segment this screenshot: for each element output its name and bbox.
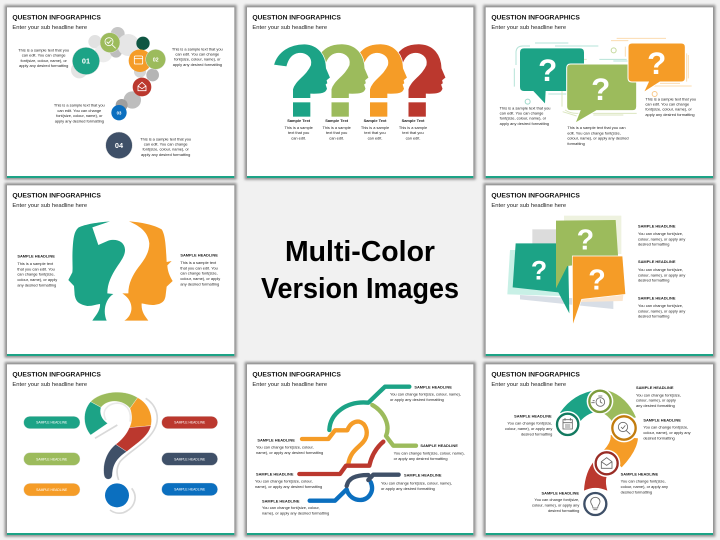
heading: QUESTION INFOGRAPHICS <box>491 15 580 22</box>
heading: QUESTION INFOGRAPHICS <box>252 15 341 22</box>
text block 02: font(size, colour, name), or <box>174 57 221 62</box>
label 3: colour, name), or apply any <box>643 430 691 435</box>
teal line <box>329 387 409 430</box>
teal face <box>68 221 125 321</box>
subheading: Enter your sub headline here <box>491 25 566 31</box>
caption 3: This is a sample <box>361 125 389 130</box>
caption 4: can edit. <box>406 135 420 140</box>
right text block: any desired formatting <box>180 281 219 286</box>
text block 02: can edit. You can change <box>175 52 219 57</box>
orange head question mark <box>357 44 407 117</box>
text block middle: formatting <box>567 141 585 146</box>
panel: slide 3, speech bubbles <box>483 5 715 180</box>
text block left: apply any desired formatting <box>500 121 549 126</box>
green speech bubble <box>567 64 637 123</box>
right text block: SAMPLE HEADLINE <box>180 253 218 258</box>
label 3: or apply any desired formatting <box>394 456 448 461</box>
icon: magnifier <box>610 414 638 442</box>
text block 04: can edit. You can change <box>144 142 188 147</box>
label 3: SAMPLE HEADLINE <box>420 443 458 448</box>
panel: slide 6, segmented question mark <box>5 362 237 537</box>
text block 03: apply any desired formatting <box>55 118 104 123</box>
center title: Version Images <box>261 273 459 305</box>
label 2: desired formatting <box>521 431 552 436</box>
text block 03: can edit. You can change <box>57 108 101 113</box>
label 4: SAMPLE HEADLINE <box>621 471 659 476</box>
subheading: Enter your sub headline here <box>491 382 566 388</box>
pill red: SAMPLE HEADLINE <box>174 421 206 425</box>
text block right: apply any desired formatting <box>645 112 695 117</box>
right text block: colour, name), or apply <box>180 276 220 281</box>
text block right: can edit. You can change <box>645 102 689 107</box>
label 5: or apply any desired formatting <box>381 486 435 491</box>
right text block: can change font(size, <box>180 271 218 276</box>
caption 1: text that you <box>288 130 309 135</box>
caption 4: Sample Text <box>402 118 425 123</box>
text block 1: SAMPLE HEADLINE <box>638 224 676 229</box>
red line <box>299 442 383 474</box>
left text block: any desired formatting <box>17 282 56 287</box>
label 3: desired formatting <box>643 435 675 440</box>
heading: QUESTION INFOGRAPHICS <box>12 371 101 378</box>
pill teal: SAMPLE HEADLINE <box>36 421 68 425</box>
text block middle: edit. You can change font(size, <box>567 130 621 135</box>
text block 3: You can change font(size, <box>638 303 683 308</box>
label 2: You can change font(size, colour, <box>256 445 314 450</box>
pill green <box>24 453 80 465</box>
pill red <box>162 416 218 429</box>
question mark segments <box>85 392 152 479</box>
label 4: name), or apply any desired formatting <box>255 484 322 489</box>
left text block: SAMPLE HEADLINE <box>17 253 55 258</box>
green speech bubble: ? <box>591 72 610 107</box>
left text block: can change font(size, <box>17 272 55 277</box>
label 2: SAMPLE HEADLINE <box>514 414 552 419</box>
green head question mark <box>318 44 369 117</box>
text block 3: desired formatting <box>638 314 669 319</box>
green bubble: ? <box>577 224 594 256</box>
orange face <box>122 221 173 321</box>
pill teal <box>24 416 80 429</box>
caption 3: text that you <box>364 130 386 135</box>
circle 03 <box>111 105 127 120</box>
grey contour strokes <box>95 398 157 513</box>
label 4: colour, name), or apply any <box>621 484 668 489</box>
panel: slide 8, icon question mark <box>483 362 715 537</box>
circle 03: 03 <box>117 110 122 115</box>
text block 3: colour, name), or apply any <box>638 308 685 313</box>
subheading: Enter your sub headline here <box>252 25 327 31</box>
teal speech bubble <box>520 48 584 103</box>
subheading: Enter your sub headline here <box>12 203 87 209</box>
heading: QUESTION INFOGRAPHICS <box>252 371 341 378</box>
label 1: any desired formatting <box>636 403 675 408</box>
left text block: This is a sample text <box>17 261 54 266</box>
icon: lightbulb <box>582 490 609 518</box>
text block left: font(size, colour, name), or <box>500 116 547 121</box>
blue line <box>310 482 372 501</box>
label 4: You can change font(size, <box>621 479 666 484</box>
text block left: can edit. You can change <box>500 110 544 115</box>
teal speech bubble: ? <box>538 53 557 88</box>
label 4: desired formatting <box>621 489 652 494</box>
heading: QUESTION INFOGRAPHICS <box>491 371 580 378</box>
pill slate <box>162 453 218 465</box>
text block 01: This is a sample text that you <box>18 48 69 53</box>
caption 3: Sample Text <box>364 118 387 123</box>
label 5: desired formatting <box>548 508 579 513</box>
pill blue: SAMPLE HEADLINE <box>174 487 206 491</box>
blue dot <box>105 483 129 507</box>
orange line <box>302 422 367 464</box>
pill orange <box>24 483 80 496</box>
text block 1: colour, name), or apply any <box>638 236 685 241</box>
pill green: SAMPLE HEADLINE <box>36 457 68 461</box>
text block 02: apply any desired formatting <box>173 62 222 67</box>
circle 01: 01 <box>82 57 90 66</box>
label 2: name), or apply any desired formatting <box>256 450 323 455</box>
caption 4: This is a sample <box>399 125 427 130</box>
panel: slide 1, bubble question mark <box>5 5 237 180</box>
circle 02: 02 <box>153 57 159 63</box>
icon: magnifier check <box>100 33 120 53</box>
caption 2: Sample Text <box>325 118 349 123</box>
text block middle: colour, name), or apply any desired <box>567 136 629 141</box>
text block 03: This is a sample text that you <box>54 103 105 108</box>
text block 03: font(size, colour, name), or <box>56 113 103 118</box>
label 1: SAMPLE HEADLINE <box>414 385 452 390</box>
label 4: SAMPLE HEADLINE <box>256 471 294 476</box>
red head question mark <box>395 44 446 117</box>
text block 2: You can change font(size, <box>638 267 683 272</box>
label 3: You can change font(size, <box>643 425 688 430</box>
decorative lines <box>514 38 692 116</box>
text block 3: SAMPLE HEADLINE <box>638 295 676 300</box>
label 1: or apply any desired formatting <box>390 397 444 402</box>
green bubble <box>556 220 618 288</box>
text block left: This is a sample text that you <box>500 105 550 110</box>
caption 1: This is a sample <box>284 125 313 130</box>
text block 04: font(size, colour, name), or <box>142 147 190 152</box>
label 1: SAMPLE HEADLINE <box>636 385 674 390</box>
caption 1: Sample Text <box>287 118 311 123</box>
text block 1: desired formatting <box>638 241 669 246</box>
label 1: colour, name), or apply <box>636 398 676 403</box>
text block 04: apply any desired formatting <box>141 152 190 157</box>
band segments <box>560 390 638 491</box>
center title: Multi-Color <box>285 236 435 268</box>
panel: slide 4, two faces question mark <box>5 183 237 358</box>
slate line <box>347 475 399 486</box>
label 1: You can change font(size, <box>636 392 681 397</box>
bubble cluster <box>71 27 159 111</box>
label 6: You can change font(size, colour, <box>262 505 320 510</box>
label 2: SAMPLE HEADLINE <box>257 437 295 442</box>
label 5: SAMPLE HEADLINE <box>404 473 442 478</box>
label 5: You can change font(size, colour, name), <box>381 481 452 486</box>
label 5: SAMPLE HEADLINE <box>542 490 579 495</box>
orange speech bubble: ? <box>647 46 666 81</box>
text block 04: This is a sample text that you <box>140 136 191 141</box>
text block right: font(size, colour, name), or <box>645 107 692 112</box>
text block 01: font(size, colour, name), or <box>20 58 68 63</box>
subheading: Enter your sub headline here <box>12 382 87 388</box>
caption 2: text that you <box>326 130 347 135</box>
right text block: This is a sample text <box>180 260 217 265</box>
label 2: You can change font(size, <box>507 421 552 426</box>
teal head question mark <box>274 44 330 117</box>
left text block: that you can edit. You <box>17 266 55 271</box>
text block 2: colour, name), or apply any <box>638 272 685 277</box>
right text block: that you can edit. You <box>180 265 218 270</box>
text block 01: apply any desired formatting <box>19 63 68 68</box>
label 3: SAMPLE HEADLINE <box>643 417 681 422</box>
caption 2: can edit. <box>329 135 344 140</box>
label 2: colour, name), or apply any <box>505 426 552 431</box>
circle 01 <box>72 47 100 75</box>
text block 02: This is a sample text that you <box>172 46 223 51</box>
label 1: You can change font(size, colour, name), <box>390 392 461 397</box>
teal bubble <box>513 243 569 313</box>
pill blue <box>162 483 218 496</box>
caption 2: This is a sample <box>322 125 351 130</box>
caption 1: can edit. <box>291 135 306 140</box>
icon: envelope <box>133 78 151 96</box>
circle 02 <box>146 49 166 69</box>
orange bubble: ? <box>588 264 606 296</box>
left text block: colour, name), or apply <box>17 277 57 282</box>
label 5: You can change font(size, <box>534 497 579 502</box>
label 6: name), or apply any desired formatting <box>262 510 329 515</box>
subheading: Enter your sub headline here <box>491 203 566 209</box>
circle 04 <box>106 132 132 159</box>
caption 3: can edit. <box>368 135 382 140</box>
panel: slide 5, folded speech bubbles <box>483 183 715 358</box>
icon: stopwatch <box>587 388 613 415</box>
orange bubble <box>572 256 626 326</box>
label 4: You can change font(size, colour, <box>255 479 313 484</box>
center title <box>261 236 459 305</box>
label 5: colour, name), or apply any <box>532 502 579 507</box>
circle 04: 04 <box>115 141 124 150</box>
text block middle: This is a sample text that you can <box>567 125 626 130</box>
label 3: You can change font(size, colour, name), <box>394 451 465 456</box>
icon: calendar <box>129 49 151 72</box>
orange speech bubble <box>628 43 685 93</box>
subheading: Enter your sub headline here <box>12 25 87 31</box>
text block 2: desired formatting <box>638 277 669 282</box>
text block 2: SAMPLE HEADLINE <box>638 259 676 264</box>
green line <box>372 405 416 446</box>
panel: slide 2, question mark heads <box>245 5 476 180</box>
background shapes <box>507 216 623 309</box>
subheading: Enter your sub headline here <box>252 382 327 388</box>
caption 4: text that you <box>402 130 424 135</box>
text block 1: You can change font(size, <box>638 231 683 236</box>
icon: envelope <box>593 450 620 477</box>
heading: QUESTION INFOGRAPHICS <box>12 15 101 22</box>
icon: calendar <box>554 411 581 438</box>
teal bubble: ? <box>531 255 547 285</box>
heading: QUESTION INFOGRAPHICS <box>491 192 580 199</box>
text block 01: can edit. You can change <box>22 53 66 58</box>
label 6: SAMPLE HEADLINE <box>262 498 300 503</box>
pill slate: SAMPLE HEADLINE <box>174 457 206 461</box>
heading: QUESTION INFOGRAPHICS <box>12 192 101 199</box>
panel: slide 7, line question mark <box>245 362 476 537</box>
pill orange: SAMPLE HEADLINE <box>36 488 68 492</box>
text block right: This is a sample text that you <box>645 96 696 101</box>
